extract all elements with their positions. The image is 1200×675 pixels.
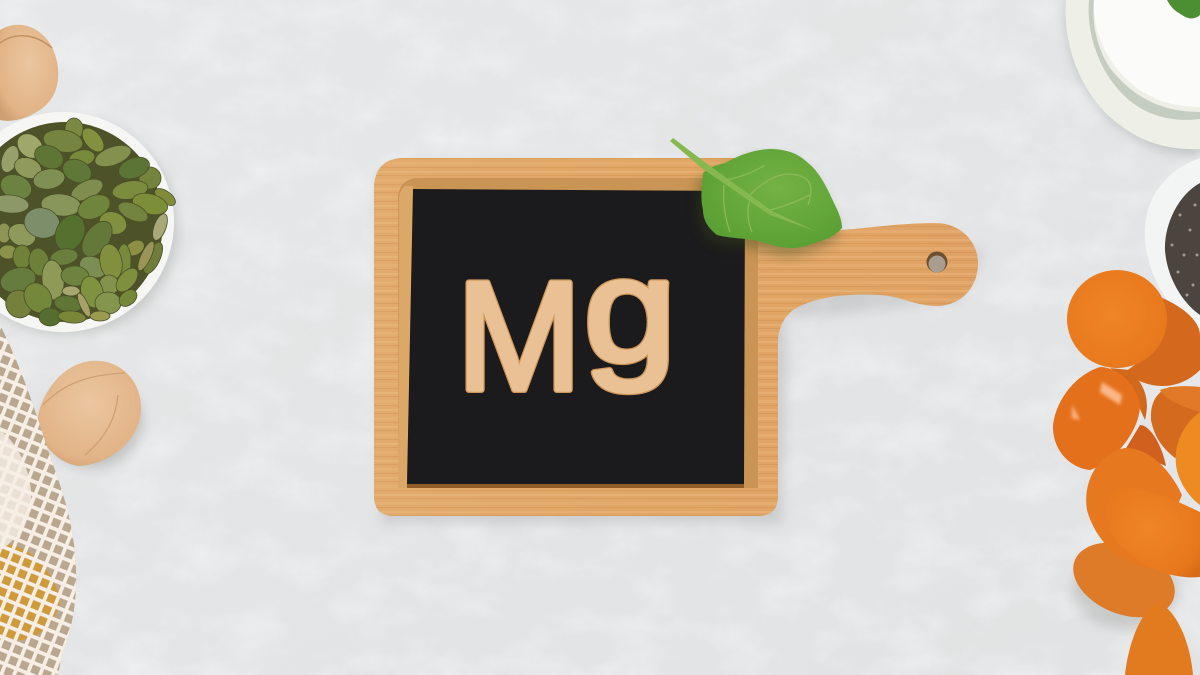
apricot: behind bowl bbox=[1125, 297, 1200, 386]
spinach leaf bbox=[670, 138, 842, 256]
heading: Mg wooden letters: g bbox=[584, 228, 676, 393]
apricot: small wedge bbox=[1125, 425, 1166, 466]
apricot: shiny bbox=[1110, 368, 1147, 420]
board body with handle bbox=[374, 158, 978, 516]
mesh bag bbox=[0, 325, 76, 675]
hang hole bbox=[926, 252, 948, 272]
heading: Mg wooden letters: M bbox=[456, 250, 582, 423]
heading: Mg wooden letters: g bbox=[584, 228, 676, 393]
yogurt bbox=[1094, 0, 1200, 107]
yogurt jar bbox=[1066, 0, 1200, 158]
apricot: right halves bbox=[1151, 387, 1200, 458]
wood grain bbox=[374, 158, 978, 516]
walnut: top left bbox=[0, 25, 58, 121]
bowl: chia seeds bbox=[1145, 158, 1200, 332]
apricot: front bbox=[1107, 488, 1200, 577]
apricot: right edge bbox=[1176, 412, 1200, 505]
walnut: middle left bbox=[38, 361, 143, 468]
heading: Mg wooden letters: M bbox=[456, 250, 582, 423]
dried apricots bbox=[1053, 270, 1200, 675]
heading: Mg wooden letters bbox=[456, 228, 676, 423]
apricot: bottom bbox=[1125, 602, 1193, 675]
apricot: top bbox=[1067, 270, 1167, 368]
board recess bbox=[398, 178, 758, 488]
bowl: pumpkin seeds bbox=[0, 112, 178, 336]
leaf garnish bbox=[1167, 0, 1200, 18]
black card bbox=[407, 189, 745, 488]
apricot: lower bbox=[1062, 529, 1186, 631]
apricot: middle bbox=[1086, 448, 1182, 568]
cutting board bbox=[374, 158, 985, 524]
